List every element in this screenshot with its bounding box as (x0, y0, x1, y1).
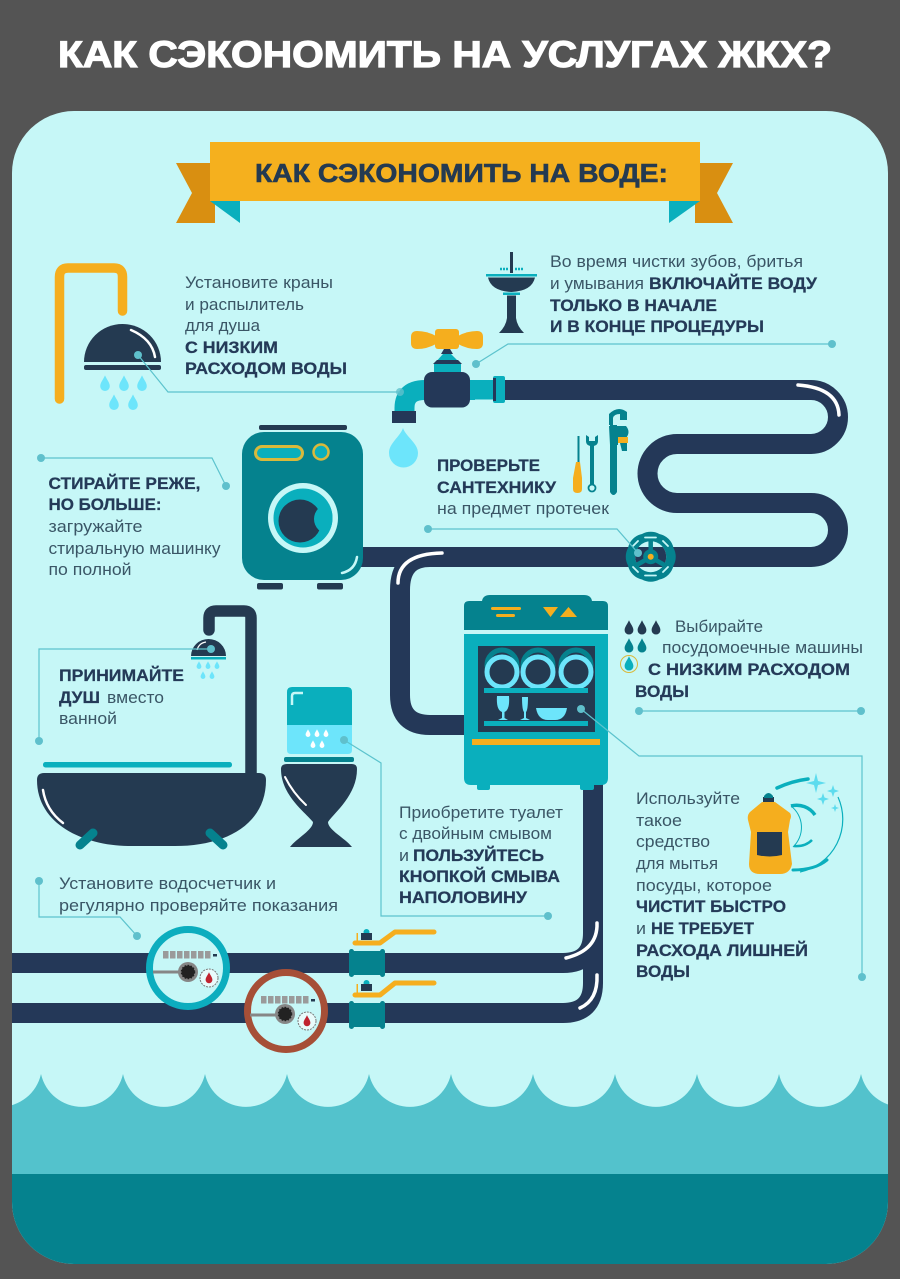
text: dual-flush toilet: КНОПКОЙ СМЫВА (399, 867, 560, 886)
text: shower instead of bath (59, 666, 184, 728)
text: dish detergent advice: такое (636, 812, 682, 830)
icon: hot water meter (248, 972, 324, 1050)
icon: washing machine (242, 425, 363, 590)
text: low-flow faucets and shower (185, 274, 347, 378)
banner: how to save on water (176, 142, 733, 223)
text: dish detergent advice: средство (636, 833, 710, 851)
text: wash less often, but more: НО БОЛЬШЕ: (48, 496, 162, 514)
text: choose efficient dishwashers: Выбирайте (675, 618, 763, 636)
text: low-flow faucets and shower: и распылитель (185, 296, 304, 314)
text: wash less often, but more (48, 474, 221, 579)
text: dish detergent advice: НЕ ТРЕБУЕТ (651, 920, 754, 938)
text: dual-flush toilet: НАПОЛОВИНУ (399, 889, 528, 907)
icon: plumbing tools (573, 409, 628, 495)
text: turn on water only at start and end: и умывания (550, 275, 644, 293)
text: low-flow faucets and shower: для душа (185, 317, 261, 335)
waves at the bottom (0, 1074, 900, 1269)
text: turn on water only at start and end: ВКЛЮЧАЙТЕ ВОДУ (649, 274, 818, 293)
text: wash less often, but more: СТИРАЙТЕ РЕЖЕ, (48, 474, 200, 493)
text: install a water meter: регулярно проверяйте показания (59, 897, 338, 915)
text: dish detergent advice: Используйте (636, 790, 740, 808)
text: wash less often, but more: загружайте (48, 518, 142, 536)
text: wash less often, but more: по полной (48, 561, 132, 579)
text: dish detergent advice (636, 790, 808, 981)
text: check the plumbing (437, 457, 610, 518)
text: turn on water only at start and end: И В КОНЦЕ ПРОЦЕДУРЫ (550, 318, 764, 336)
icon: cold water meter (150, 930, 226, 1006)
text: turn on water only at start and end: ТОЛЬКО В НАЧАЛЕ (550, 297, 717, 315)
text: dish detergent advice: ЧИСТИТ БЫСТРО (636, 898, 786, 916)
icon: dish soap and plate (748, 773, 843, 874)
text: dual-flush toilet: ПОЛЬЗУЙТЕСЬ (413, 846, 544, 865)
text: choose efficient dishwashers: посудомоечные машины (662, 639, 863, 657)
text: shower instead of bath: ванной (59, 710, 117, 728)
text: choose efficient dishwashers: ВОДЫ (635, 683, 689, 701)
text: install a water meter: Установите водосчетчик и (59, 875, 276, 893)
text: check the plumbing: САНТЕХНИКУ (437, 479, 557, 497)
text: check the plumbing: на предмет протечек (437, 500, 610, 518)
text: dish detergent advice: и (636, 920, 646, 938)
text: dish detergent advice: посуды, которое (636, 877, 772, 895)
icon: ball valves (349, 929, 434, 1029)
icon: water consumption drops (620, 620, 660, 672)
text: dish detergent advice: для мытья (636, 855, 718, 873)
text: shower instead of bath: ПРИНИМАЙТЕ (59, 666, 184, 685)
text: choose efficient dishwashers (635, 618, 863, 701)
text: shower instead of bath: вместо (107, 689, 164, 707)
text: dish detergent advice: РАСХОДА ЛИШНЕЙ (636, 941, 808, 960)
icon: bathroom sink (486, 252, 537, 333)
text: low-flow faucets and shower: Установите краны (185, 274, 333, 292)
text: turn on water only at start and end (550, 253, 818, 336)
text: install a water meter (59, 875, 338, 915)
text: low-flow faucets and shower: С НИЗКИМ (185, 339, 278, 357)
text: shower instead of bath: ДУШ (59, 689, 100, 707)
text: check the plumbing: ПРОВЕРЬТЕ (437, 457, 540, 475)
text: choose efficient dishwashers: С НИЗКИМ РАСХОДОМ (648, 661, 850, 679)
main title: КАК СЭКОНОМИТЬ НА УСЛУГАХ ЖКХ? (58, 34, 832, 75)
callout lines and dots (35, 340, 866, 981)
text: wash less often, but more: стиральную машинку (48, 540, 221, 558)
banner: how to save on water: КАК СЭКОНОМИТЬ НА ВОДЕ: (255, 158, 668, 188)
text: dual-flush toilet (399, 804, 563, 907)
text: dual-flush toilet: и (399, 847, 409, 865)
icon: dishwasher (464, 595, 608, 790)
text: dish detergent advice: ВОДЫ (636, 963, 690, 981)
icon: toilet (281, 687, 357, 847)
text: dual-flush toilet: Приобретите туалет (399, 804, 563, 822)
text: dual-flush toilet: с двойным смывом (399, 825, 552, 843)
pipe highlights (398, 385, 839, 1008)
icon: faucet (389, 329, 505, 468)
icon: valve wheel (626, 532, 676, 582)
text: turn on water only at start and end: Во время чистки зубов, бритья (550, 253, 803, 271)
text: low-flow faucets and shower: РАСХОДОМ ВОДЫ (185, 360, 347, 378)
main water pipes (12, 390, 838, 1013)
icon: shower with yellow pipe (60, 268, 161, 410)
icon: bathtub with shower (37, 611, 266, 846)
